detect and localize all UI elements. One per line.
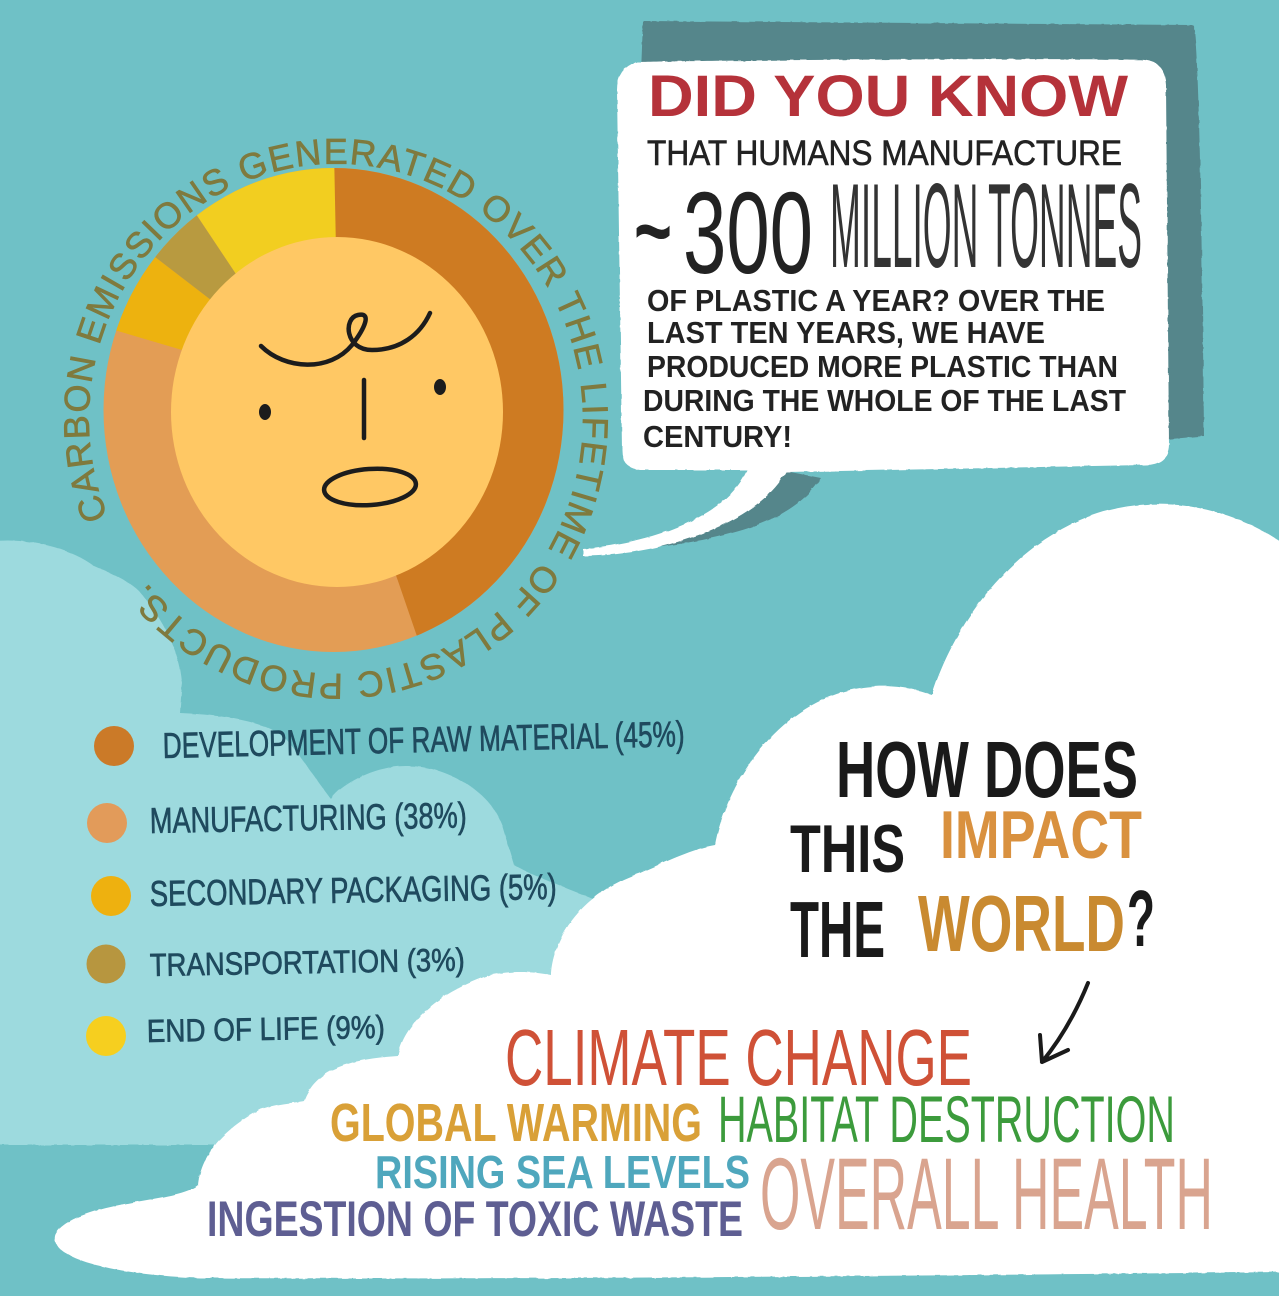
legend <box>86 713 685 1056</box>
right eye <box>434 379 446 395</box>
white foreground cloud <box>55 504 1279 1278</box>
callout heading: DID YOU KNOW <box>648 64 1128 129</box>
question heading: WORLD <box>918 879 1125 968</box>
segment: end of life 9% <box>196 168 336 274</box>
callout text block: THAT HUMANS MANUFACTURE <box>647 134 1122 173</box>
legend dot: secondary packaging <box>91 876 131 916</box>
question heading: HOW DOES <box>836 725 1138 814</box>
left eye <box>259 404 271 420</box>
legend label: transportation: TRANSPORTATION (3%) <box>149 942 465 983</box>
question heading: THE <box>790 885 885 974</box>
legend label: manufacturing: MANUFACTURING (38%) <box>149 794 467 841</box>
legend label: end of life: END OF LIFE (9%) <box>146 1009 385 1049</box>
segment: transportation 3% <box>156 215 236 299</box>
arrow pointing to impacts <box>1040 983 1088 1062</box>
legend dot: manufacturing <box>87 803 127 843</box>
mouth <box>323 466 417 508</box>
question heading <box>790 725 1155 974</box>
big statistic: 300 <box>683 168 813 298</box>
face drawing <box>259 313 446 508</box>
speech bubble shadow <box>640 21 1204 548</box>
legend label: secondary packaging: SECONDARY PACKAGING (5%) <box>149 866 557 914</box>
legend dot: end of life <box>86 1016 126 1056</box>
segment: development of raw material 45% <box>334 168 564 636</box>
eyebrow squiggle <box>261 313 430 365</box>
impact: global warming: GLOBAL WARMING <box>330 1093 702 1153</box>
legend dot: development of raw material <box>94 726 134 766</box>
donut centre face <box>171 237 503 587</box>
callout text block: PRODUCED MORE PLASTIC THAN <box>647 349 1118 384</box>
question heading: IMPACT <box>940 797 1142 873</box>
question heading: THIS <box>790 811 905 887</box>
callout text block <box>634 134 1142 454</box>
callout text block: CENTURY! <box>643 419 792 454</box>
question heading: ? <box>1127 874 1155 963</box>
speech bubble <box>583 59 1169 556</box>
legend dot: transportation <box>86 944 126 984</box>
callout text block: DURING THE WHOLE OF THE LAST <box>643 383 1126 418</box>
impact: rising sea levels: RISING SEA LEVELS <box>375 1146 750 1198</box>
impact: climate change: CLIMATE CHANGE <box>505 1013 972 1102</box>
big statistic <box>634 159 1142 298</box>
light background cloud <box>0 540 610 1145</box>
donut chart: carbon emissions by stage <box>104 168 564 652</box>
segment: manufacturing 38% <box>104 168 564 652</box>
nose <box>362 380 366 438</box>
callout text block: LAST TEN YEARS, WE HAVE <box>647 315 1045 350</box>
circular caption around donut: CARBON EMISSIONS GENERATED OVER THE LIFETIME OF PLASTIC PRODUCTS. <box>64 138 608 699</box>
impacts word cloud <box>207 1013 1213 1251</box>
segment: secondary packaging 5% <box>116 257 210 350</box>
impact: ingestion of toxic waste: INGESTION OF TOXIC WASTE <box>207 1191 743 1247</box>
callout text block: OF PLASTIC A YEAR? OVER THE <box>647 283 1105 318</box>
big statistic: ~ <box>634 180 672 282</box>
legend label: development of raw material: DEVELOPMENT OF RAW MATERIAL (45%) <box>162 713 685 766</box>
